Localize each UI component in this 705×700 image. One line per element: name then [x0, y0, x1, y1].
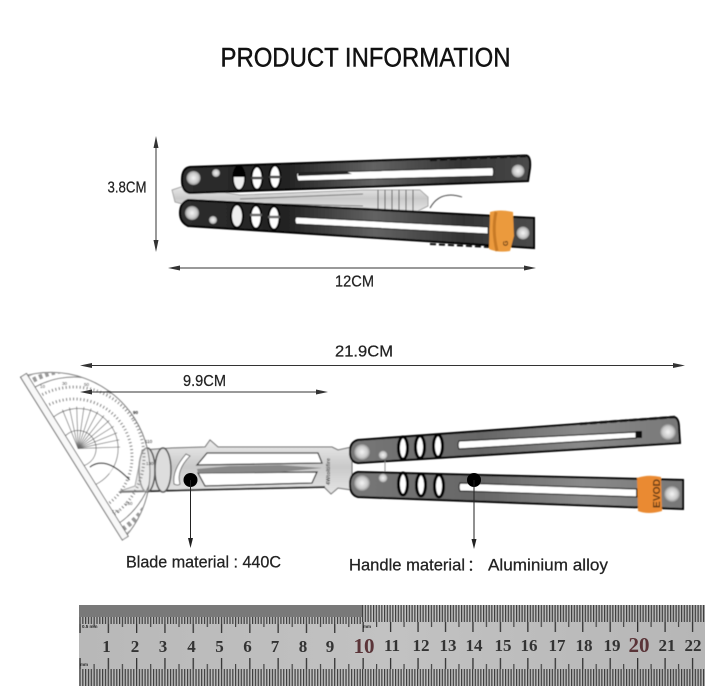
ruler numbers: 15	[494, 636, 512, 655]
lower handle	[180, 200, 534, 248]
ruler numbers: 5	[215, 637, 224, 656]
label: handle material: ：	[467, 558, 483, 574]
label: 21.9CM: 21.9CM	[335, 344, 393, 360]
orange band	[489, 210, 514, 252]
ruler numbers: 16	[520, 636, 538, 655]
ruler numbers: 19	[604, 636, 620, 655]
label: 9.9CM: 9.9CM	[183, 373, 226, 390]
callout: blade pointer	[184, 473, 198, 548]
upper handle	[350, 417, 680, 463]
protractor	[20, 371, 151, 542]
orange band: G	[503, 240, 510, 246]
ruler numbers: 6	[243, 637, 252, 656]
orange band	[637, 476, 663, 513]
protractor scale numbers: 160	[125, 501, 133, 506]
folded blade	[172, 186, 462, 211]
lower handle	[350, 472, 683, 509]
ruler numbers: 14	[466, 636, 483, 655]
protractor scale numbers: 110	[145, 439, 153, 444]
title: PRODUCT INFORMATION	[220, 42, 510, 72]
ruler numbers: 17	[548, 636, 566, 655]
label: 12CM: 12CM	[335, 274, 374, 290]
arrow: blade length	[80, 390, 328, 394]
ruler numbers: 11	[384, 636, 400, 655]
pin link line	[384, 460, 386, 475]
upper handle	[182, 156, 530, 193]
orange band: EVOD	[652, 479, 663, 508]
panel: folded knife with dimensions	[108, 136, 536, 290]
ruler numbers: 20	[628, 633, 650, 657]
ruler unit marks	[80, 624, 371, 667]
ruler numbers: 10	[354, 634, 374, 658]
panel: steel ruler	[79, 605, 705, 686]
arrow: height dimension	[154, 136, 158, 252]
ruler numbers: 4	[187, 637, 196, 656]
ruler unit marks: mm	[80, 662, 88, 667]
ruler numbers: 18	[576, 636, 592, 655]
ruler unit marks: mm	[363, 624, 371, 629]
protractor scale numbers	[40, 381, 154, 514]
label: aluminium alloy: Aluminium alloy	[488, 556, 609, 574]
ruler numbers: 2	[131, 637, 139, 656]
protractor scale numbers: 30	[62, 381, 68, 386]
folded knife photo	[172, 156, 534, 252]
label: 3.8CM: 3.8CM	[108, 180, 146, 196]
protractor scale numbers: 90	[133, 410, 139, 415]
ruler numbers: 9	[326, 637, 334, 656]
protractor scale numbers: 10	[40, 384, 46, 389]
ruler numbers: 7	[271, 637, 280, 656]
panel: open knife with dimensions	[20, 345, 685, 574]
ruler numbers: 8	[299, 637, 307, 656]
ruler unit marks: 0.5 mm	[82, 624, 98, 629]
ruler numbers: 3	[159, 637, 167, 656]
ruler body	[79, 605, 705, 686]
protractor scale numbers: 130	[146, 461, 154, 466]
ruler numbers: 12	[412, 636, 430, 655]
ruler numbers: 21	[658, 636, 676, 655]
blade: 4Wtoltifire	[326, 458, 332, 485]
blade	[120, 440, 352, 494]
ruler numbers	[102, 633, 702, 658]
arrow: total open length	[80, 363, 685, 368]
ruler numbers: 1	[102, 637, 111, 656]
arrow: length dimension	[168, 266, 536, 270]
label: blade material: Blade material : 440C	[126, 554, 281, 572]
label: handle material: Handle material	[349, 556, 465, 574]
protractor scale numbers: 50	[84, 382, 90, 387]
callout: handle pointer	[467, 473, 481, 549]
protractor scale numbers: 170	[112, 509, 120, 514]
open knife photo	[20, 371, 685, 542]
ruler numbers: 13	[440, 636, 456, 655]
protractor scale numbers: 70	[106, 390, 112, 395]
ruler numbers: 22	[684, 636, 702, 655]
